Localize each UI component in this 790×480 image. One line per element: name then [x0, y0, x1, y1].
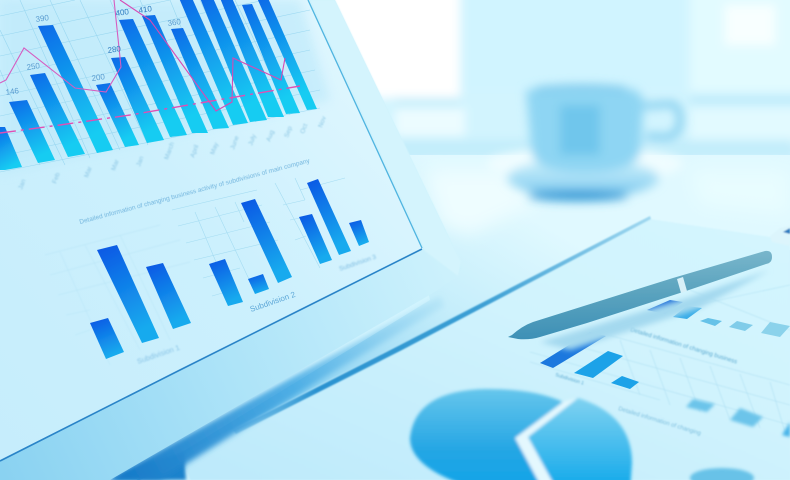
paper chart grid: [530, 285, 790, 432]
trend line second segment: [120, 0, 285, 111]
month labels: Feb: [51, 171, 62, 185]
subdivision labels: Subdivision 1: [136, 343, 181, 366]
pen clip ring: [677, 277, 687, 293]
month labels: March: [163, 141, 176, 161]
upper chart grid: [0, 0, 320, 172]
tablet shadow band: [105, 296, 445, 480]
small binder clip at right edge: [770, 226, 790, 246]
month labels: Jan: [135, 155, 146, 168]
dark area under tablet corner: [110, 452, 186, 480]
month labels: Aug: [265, 129, 276, 143]
table surface: [120, 155, 790, 480]
paper chart caption: Detailed information of changing business: [629, 327, 738, 365]
month labels: Sep: [283, 125, 294, 139]
pen: [508, 251, 772, 350]
cup shaded centre: [560, 105, 600, 155]
bar value labels: 280: [107, 44, 122, 55]
trend line: [0, 0, 121, 92]
lower chart: subdivision 3: [299, 179, 369, 264]
bar value labels: 360: [167, 17, 182, 28]
paper chart caption: Subdivision 1: [554, 372, 585, 387]
screen chart contents: [0, 0, 378, 366]
pen body: [508, 251, 772, 339]
saucer body: [507, 159, 659, 197]
subdivision labels: [136, 254, 378, 366]
lower chart: subdivision 1: [90, 245, 191, 359]
month labels: July: [247, 133, 258, 147]
month labels: Jan: [17, 178, 28, 191]
month labels: Mar: [83, 165, 94, 179]
lower chart: subdivision 2: [209, 199, 292, 306]
month labels: Nov: [317, 115, 328, 129]
bar value labels: 200: [91, 72, 106, 83]
saucer rim: [487, 147, 683, 181]
bar value labels: [5, 4, 182, 97]
saucer shadow: [528, 191, 628, 201]
tablet: [0, 0, 461, 480]
bar value labels: 390: [35, 13, 50, 24]
bar value labels: 410: [138, 4, 153, 15]
month labels: Oct: [299, 123, 309, 135]
month labels: May: [209, 141, 220, 156]
lower charts heading: Detailed information of changing business activity of subdivisions of main company: [79, 157, 311, 226]
subdivision labels: Subdivision 3: [338, 254, 378, 273]
paper bar charts: [540, 300, 790, 389]
screen right edge: [308, 0, 422, 248]
month labels: [17, 115, 328, 191]
right pie slice: [528, 398, 632, 480]
month labels: April: [189, 144, 201, 159]
upper bars: [0, 0, 317, 170]
month labels: Mar: [110, 158, 121, 172]
pen shadow: [540, 270, 770, 350]
paper report sheet: [183, 219, 790, 480]
cup handle: [644, 104, 680, 137]
paper edge shadow line: [233, 216, 651, 434]
bar value labels: 146: [5, 86, 20, 97]
coffee cup and saucer: [487, 86, 683, 201]
table highlights: [425, 170, 790, 235]
bar value labels: 250: [26, 61, 41, 72]
cup body: [526, 87, 644, 172]
paper chart caption: [554, 327, 738, 437]
upper bezel lighter edge: [310, 0, 461, 276]
upper chart background wash: [0, 0, 330, 175]
tablet bezel: [0, 0, 461, 480]
dashed average line: [0, 86, 300, 133]
paper chart caption: Detailed information of changing: [617, 406, 701, 437]
pie gap highlight: [515, 398, 578, 480]
blurred lower paper bars: [686, 399, 790, 480]
tablet screen: [0, 0, 422, 460]
subdivision labels: Subdivision 2: [249, 290, 297, 314]
cup rim: [536, 86, 626, 89]
screen bottom edge: [0, 249, 422, 461]
lower chart grids: [172, 178, 345, 300]
pie chart: [410, 389, 632, 480]
bar value labels: 400: [115, 7, 130, 18]
main pie slice: [410, 389, 563, 480]
month labels: June: [229, 135, 241, 151]
